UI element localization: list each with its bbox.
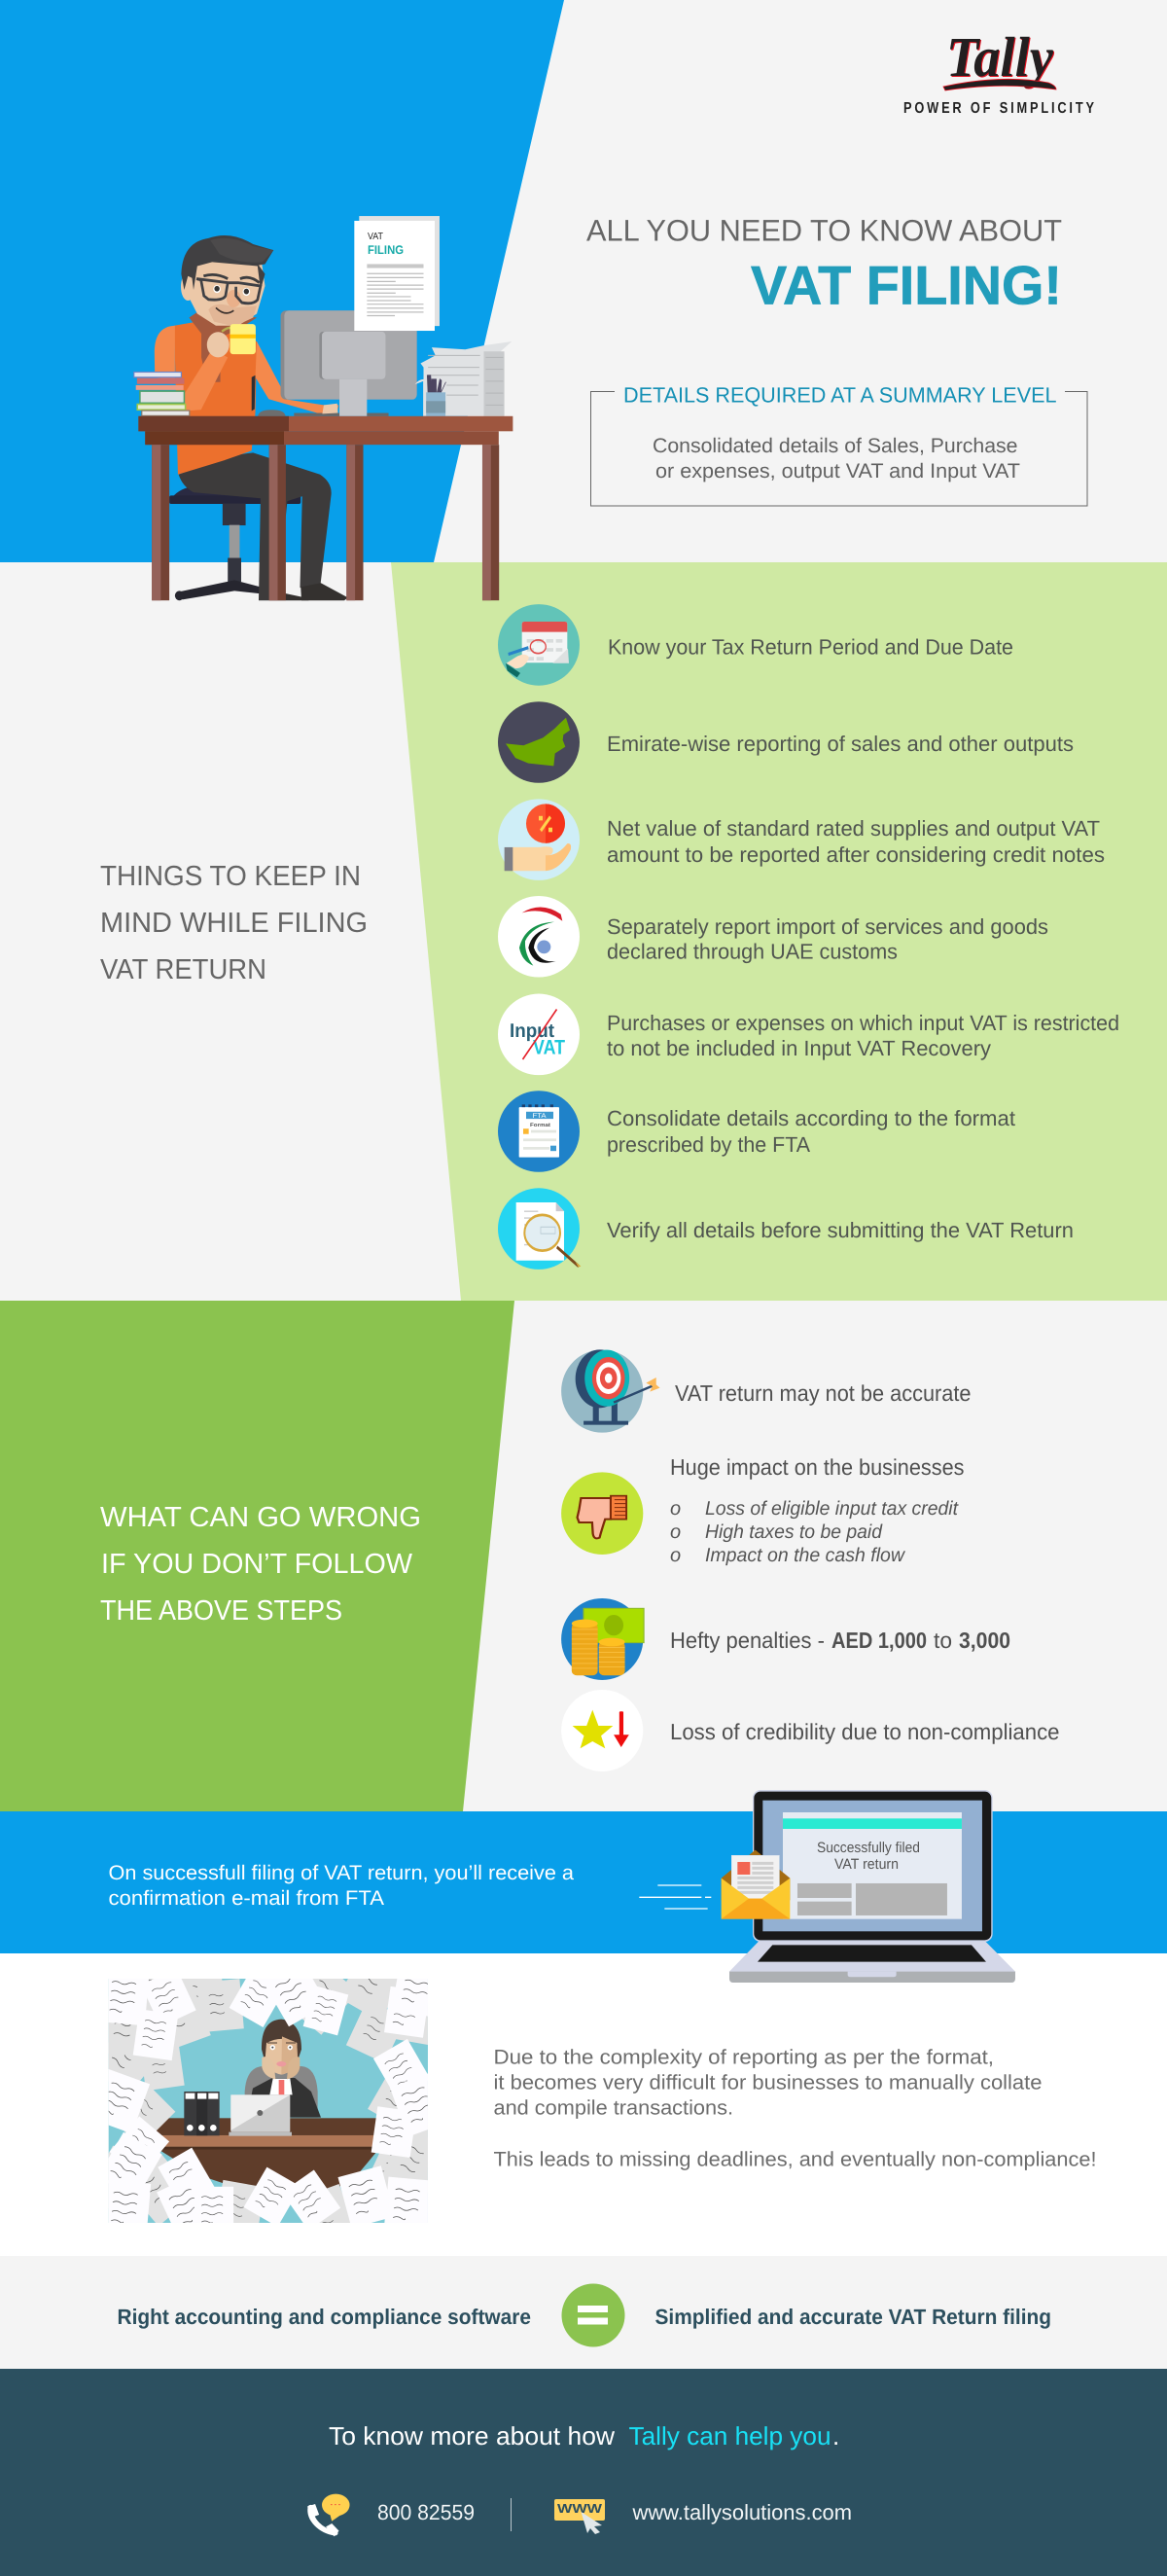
penalties line: 3,000	[959, 1628, 1010, 1653]
summary details box: or expenses, output VAT and Input VAT	[655, 460, 1020, 483]
complexity paragraph: This leads to missing deadlines, and eventually non-compliance!	[494, 2148, 1097, 2171]
stressed man	[245, 2020, 321, 2118]
summary details box: Consolidated details of Sales, Purchase	[653, 435, 1017, 457]
heading: things to keep in mind: THINGS TO KEEP IN	[100, 861, 361, 892]
screen text	[817, 1840, 920, 1873]
white paper pile	[90, 1958, 449, 2240]
checklist text: declared through UAE customs	[607, 940, 898, 963]
desk	[149, 2118, 381, 2192]
footer call to action	[329, 2421, 839, 2451]
heading: things to keep in mind: VAT RETURN	[100, 954, 266, 985]
equals icon	[562, 2284, 624, 2346]
document title: FILING	[368, 243, 404, 257]
heading: things to keep in mind	[100, 861, 368, 985]
laptop	[229, 2094, 292, 2136]
icon: www cursor: WWW	[557, 2501, 603, 2516]
checklist text: Separately report import of services and goods	[607, 914, 1048, 939]
title: VAT FILING!	[751, 255, 1062, 315]
logo: Tally	[903, 25, 1094, 117]
icon: FTA format: FTA	[533, 1113, 547, 1120]
scarf	[189, 309, 257, 382]
binders	[184, 2092, 220, 2135]
illustration: stressed man buried in paperwork	[109, 1979, 428, 2223]
icon: input VAT restricted: Input	[510, 1020, 554, 1042]
sub-points: o	[670, 1545, 681, 1566]
icon: magnifier on document	[498, 1188, 581, 1270]
desk	[138, 416, 513, 600]
icon: input VAT restricted	[498, 994, 580, 1075]
mug and forearm	[183, 324, 256, 411]
sub-points: High taxes to be paid	[705, 1521, 883, 1543]
icon: input VAT restricted: VAT	[533, 1037, 565, 1058]
checklist text: prescribed by the FTA	[607, 1132, 810, 1157]
equation: software equals accurate filing	[117, 2284, 1051, 2346]
penalties line: Hefty penalties -	[670, 1628, 825, 1653]
sub-points: Impact on the cash flow	[705, 1545, 906, 1566]
icon: thumbs down	[561, 1472, 643, 1555]
laptop screen	[753, 1790, 993, 1942]
laptop with email illustration	[639, 1790, 1015, 1983]
footer call to action: To know more about how	[329, 2421, 615, 2451]
penalties line: AED 1,000	[831, 1628, 927, 1653]
screen text: Successfully filed	[817, 1840, 920, 1856]
title	[586, 214, 1062, 315]
panel: what can go wrong	[0, 1301, 1167, 1811]
penalties line	[670, 1628, 1010, 1653]
confirmation text	[109, 1862, 574, 1910]
consequences text: Loss of credibility due to non-compliance	[670, 1719, 1060, 1744]
panel: equation strip	[0, 2256, 1167, 2369]
heading: what can go wrong: THE ABOVE STEPS	[100, 1595, 342, 1627]
heading: what can go wrong: WHAT CAN GO WRONG	[100, 1502, 421, 1533]
consequences text: Huge impact on the businesses	[670, 1454, 965, 1480]
checklist text: Know your Tax Return Period and Due Date	[608, 634, 1013, 660]
phone number: 800 82559	[377, 2500, 475, 2524]
icon: star and down arrow	[561, 1690, 643, 1771]
panel: complexity	[0, 1953, 1167, 2256]
paper stack and pen cup	[415, 341, 512, 416]
icon: percent in hand	[498, 799, 580, 880]
penalties line: to	[934, 1628, 952, 1653]
summary details box: DETAILS REQUIRED AT A SUMMARY LEVEL	[623, 383, 1056, 407]
background: header panel	[0, 0, 1167, 562]
document title	[368, 232, 404, 257]
icon: calendar	[498, 604, 580, 686]
checklist text: Emirate-wise reporting of sales and other outputs	[607, 732, 1074, 756]
document sheet	[354, 216, 440, 331]
complexity paragraph: Due to the complexity of reporting as per the format,	[494, 2047, 994, 2068]
title: ALL YOU NEED TO KNOW ABOUT	[586, 214, 1062, 247]
head	[181, 235, 273, 327]
laptop base	[729, 1940, 1015, 1983]
checklist text: Purchases or expenses on which input VAT is restricted	[607, 1011, 1119, 1035]
email envelope	[722, 1850, 790, 1919]
complexity paragraph: it becomes very difficult for businesses to manually collate	[494, 2072, 1043, 2093]
panel: footer	[0, 2369, 1167, 2576]
checklist text: Consolidate details according to the format	[607, 1106, 1015, 1130]
complexity paragraph: and compile transactions.	[494, 2097, 733, 2119]
panel: confirmation band	[0, 1811, 1167, 1953]
equation: software equals accurate filing: Right accounting and compliance software	[117, 2305, 531, 2329]
sub-points	[670, 1498, 959, 1566]
heading: what can go wrong	[100, 1502, 421, 1627]
blue header shape	[0, 0, 564, 562]
sub-points: Loss of eligible input tax credit	[705, 1498, 959, 1520]
panel: things to keep in mind	[0, 562, 1167, 1301]
icon: FTA format	[498, 1091, 580, 1172]
icon: target with arrow	[561, 1349, 660, 1433]
icon: cash and coins	[561, 1598, 644, 1680]
grey paper pile	[85, 1948, 449, 2245]
speed lines	[639, 1885, 711, 1909]
heading: things to keep in mind: MIND WHILE FILING	[100, 908, 368, 939]
confirmation text: confirmation e-mail from FTA	[109, 1887, 384, 1910]
website: www.tallysolutions.com	[632, 2500, 852, 2524]
chair	[169, 486, 301, 600]
heading: what can go wrong: IF YOU DON’T FOLLOW	[101, 1549, 413, 1580]
sub-points: o	[670, 1498, 681, 1520]
icon: customs emblem	[498, 896, 580, 978]
books	[134, 372, 190, 415]
confirmation text: On successfull filing of VAT return, you’ll receive a	[109, 1862, 574, 1884]
consequences text: VAT return may not be accurate	[675, 1380, 971, 1406]
trousers and shoes	[179, 452, 348, 600]
consequences text	[670, 1380, 1060, 1744]
illustration: man working at desk	[134, 216, 513, 600]
sub-points: o	[670, 1521, 681, 1543]
summary details box	[591, 383, 1087, 506]
checklist text: Verify all details before submitting the VAT Return	[607, 1218, 1074, 1242]
logo: Tally: POWER OF SIMPLICITY	[903, 100, 1094, 117]
checklist text	[607, 634, 1119, 1242]
icon: phone with speech bubble	[307, 2494, 350, 2536]
document title: VAT	[368, 232, 383, 242]
icon: FTA format: Format	[530, 1123, 550, 1128]
equation: software equals accurate filing: Simplified and accurate VAT Return filing	[655, 2305, 1051, 2329]
logo: Tally: Tally	[946, 25, 1053, 89]
complexity paragraph	[494, 2047, 1097, 2171]
checklist text: Net value of standard rated supplies and output VAT	[607, 816, 1100, 841]
screen text: VAT return	[834, 1856, 899, 1873]
checklist text: amount to be reported after considering credit notes	[607, 842, 1105, 867]
icon: www cursor	[554, 2499, 605, 2534]
orange shirt	[155, 322, 338, 475]
footer call to action: Tally can help you	[628, 2421, 831, 2451]
icon: UAE map	[498, 701, 580, 783]
footer call to action: .	[832, 2421, 839, 2451]
divider	[510, 2498, 512, 2531]
monitor	[258, 310, 417, 416]
checklist text: to not be included in Input VAT Recovery	[607, 1036, 991, 1060]
